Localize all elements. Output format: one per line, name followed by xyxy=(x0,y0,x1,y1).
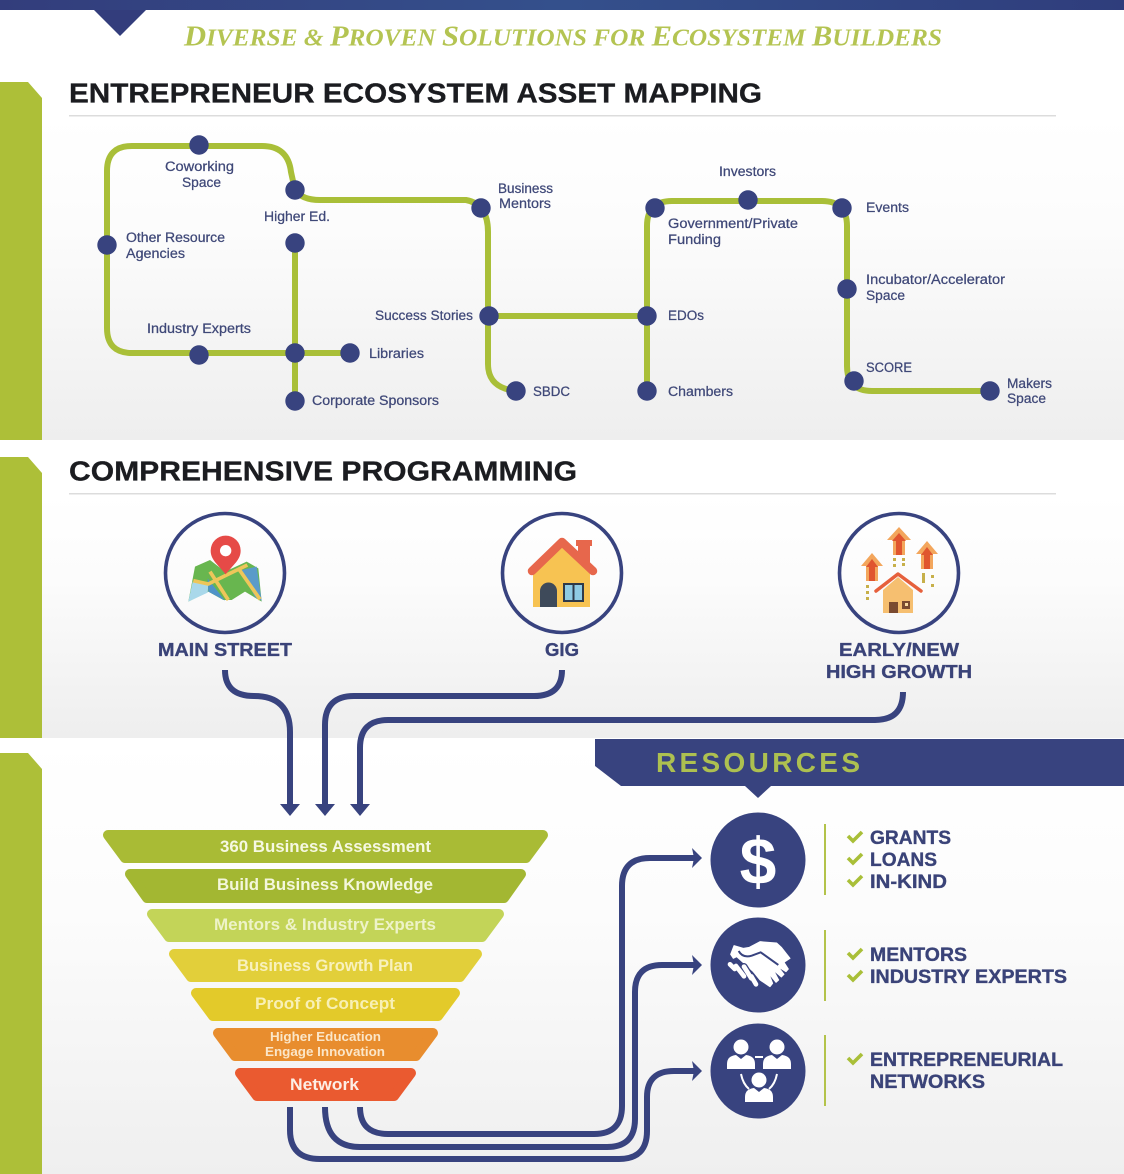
label: early/new high growth: EARLY/NEW xyxy=(839,640,959,660)
icon: main street map xyxy=(166,514,284,632)
heading: comprehensive programming: COMPREHENSIVE PROGRAMMING xyxy=(69,456,577,486)
metro labels: Funding xyxy=(668,232,721,247)
icon: early/new high growth house with arrows xyxy=(840,514,958,632)
metro labels: Chambers xyxy=(668,384,733,399)
funnel step: mentors and industry experts: Mentors & Industry Experts xyxy=(214,916,436,934)
funnel step: business growth plan: Business Growth Plan xyxy=(237,957,413,975)
resources banner xyxy=(595,739,1124,798)
list: grants loans in-kind: IN-KIND xyxy=(870,872,947,893)
list: grants loans in-kind: GRANTS xyxy=(870,828,951,849)
metro nodes xyxy=(97,135,1000,411)
metro labels: Business xyxy=(498,181,553,196)
resource: funding xyxy=(710,812,951,908)
label: gig: GIG xyxy=(545,640,579,660)
resource: networks xyxy=(710,1024,1063,1118)
funnel step: build business knowledge: Build Business Knowledge xyxy=(217,876,433,894)
list: mentors industry experts xyxy=(848,945,1067,988)
icon: handshake xyxy=(710,918,806,1012)
list: grants loans in-kind: LOANS xyxy=(870,850,937,871)
funnel step: 360 business assessment: 360 Business Assessment xyxy=(220,838,432,856)
title: DIVERSE & PROVEN SOLUTIONS FOR ECOSYSTEM BUILDERS xyxy=(183,20,942,52)
side tab: resources funnel xyxy=(0,753,42,1174)
funnel step: higher education engage innovation xyxy=(218,1029,433,1059)
metro labels: Makers xyxy=(1007,376,1052,391)
panel: ecosystem metro map xyxy=(97,135,1052,411)
side tab: asset mapping xyxy=(0,82,42,440)
label: early/new high growth: HIGH GROWTH xyxy=(826,662,972,682)
metro labels: Agencies xyxy=(126,246,185,261)
metro labels: SBDC xyxy=(533,384,570,399)
metro labels: Events xyxy=(866,200,909,215)
metro labels: Incubator/Accelerator xyxy=(866,272,1006,287)
icon: dollar xyxy=(710,812,806,908)
funnel step: business growth plan xyxy=(174,954,477,977)
resource: mentors xyxy=(710,918,1067,1012)
list: entrepreneurial networks: NETWORKS xyxy=(870,1072,985,1093)
funnel step: proof of concept: Proof of Concept xyxy=(255,995,396,1013)
funnel step: build business knowledge xyxy=(130,874,521,898)
icon: people network xyxy=(710,1024,806,1118)
metro labels: Government/Private xyxy=(668,216,798,231)
label: main street: MAIN STREET xyxy=(158,640,292,660)
metro labels: Investors xyxy=(719,164,776,179)
metro labels: Space xyxy=(182,175,221,190)
list: entrepreneurial networks xyxy=(848,1050,1063,1093)
metro labels: Industry Experts xyxy=(147,321,251,336)
metro labels: Success Stories xyxy=(375,308,473,323)
icon: gig house xyxy=(502,514,622,632)
resources heading: RESOURCES xyxy=(656,747,860,778)
funnel xyxy=(108,835,543,1096)
funnel step: network xyxy=(240,1073,411,1096)
funnel step: network: Network xyxy=(290,1076,360,1094)
icon: dollar: $ xyxy=(740,824,776,898)
funnel step: higher education engage innovation: Higher Education xyxy=(270,1029,381,1044)
metro labels: Corporate Sponsors xyxy=(312,393,439,408)
heading: asset mapping: ENTREPRENEUR ECOSYSTEM ASSET MAPPING xyxy=(69,78,762,108)
metro labels xyxy=(126,159,1052,408)
metro labels: Space xyxy=(866,288,905,303)
metro labels: SCORE xyxy=(866,360,912,375)
label: early/new high growth xyxy=(826,640,972,682)
funnel step: 360 business assessment xyxy=(108,835,543,858)
list: grants loans in-kind xyxy=(848,828,951,893)
metro lines xyxy=(107,146,990,401)
list: entrepreneurial networks: ENTREPRENEURIAL xyxy=(870,1050,1063,1071)
list: mentors industry experts: MENTORS xyxy=(870,945,967,966)
metro labels: EDOs xyxy=(668,308,704,323)
funnel step: mentors and industry experts xyxy=(152,914,499,937)
metro labels: Space xyxy=(1007,391,1046,406)
metro labels: Libraries xyxy=(369,346,424,361)
metro labels: Other Resource xyxy=(126,230,225,245)
arrows: funnel to resources xyxy=(290,848,702,1159)
side tab: programming xyxy=(0,457,42,738)
top banner with pointer xyxy=(0,0,1124,36)
funnel step: proof of concept xyxy=(196,993,455,1016)
arrows: programming into funnel xyxy=(225,670,903,816)
metro labels: Coworking xyxy=(165,159,234,174)
list: mentors industry experts: INDUSTRY EXPERTS xyxy=(870,967,1067,988)
metro labels: Higher Ed. xyxy=(264,209,330,224)
funnel step: higher education engage innovation: Engage Innovation xyxy=(265,1044,385,1059)
metro labels: Mentors xyxy=(499,196,551,211)
